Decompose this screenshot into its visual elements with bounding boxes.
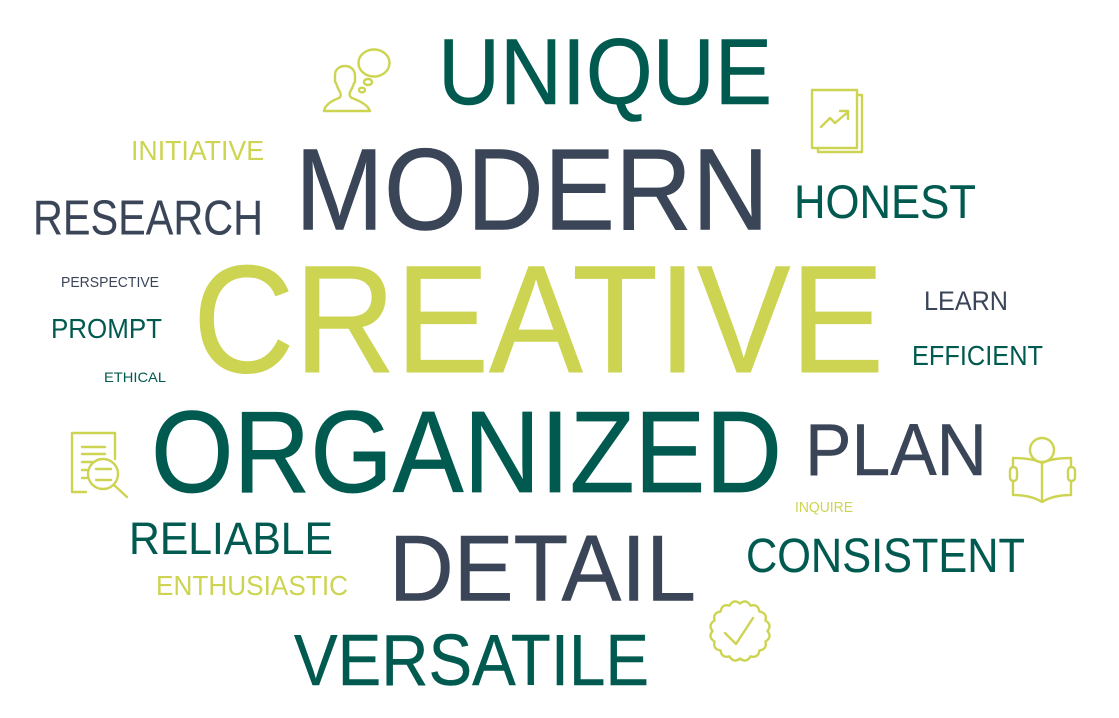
icon: document with magnifier bbox=[72, 433, 127, 497]
word: UNIQUE: UNIQUE bbox=[438, 19, 772, 124]
word: MODERN: MODERN bbox=[295, 124, 769, 254]
word: INITIATIVE: INITIATIVE bbox=[131, 135, 264, 166]
icon: report with rising chart bbox=[812, 90, 862, 152]
word: PLAN: PLAN bbox=[805, 410, 987, 491]
word: CREATIVE: CREATIVE bbox=[193, 234, 884, 405]
word: PERSPECTIVE: PERSPECTIVE bbox=[61, 274, 159, 291]
icon: person reading book bbox=[1010, 438, 1075, 502]
word: CONSISTENT: CONSISTENT bbox=[746, 530, 1025, 583]
word: INQUIRE: INQUIRE bbox=[795, 499, 853, 516]
word: DETAIL: DETAIL bbox=[389, 516, 696, 620]
word: RELIABLE: RELIABLE bbox=[129, 513, 333, 564]
word: EFFICIENT: EFFICIENT bbox=[912, 340, 1043, 371]
word: RESEARCH: RESEARCH bbox=[33, 192, 263, 246]
word: ETHICAL: ETHICAL bbox=[104, 369, 166, 385]
word: ORGANIZED: ORGANIZED bbox=[151, 387, 782, 517]
word: HONEST: HONEST bbox=[794, 175, 976, 228]
icon: check badge bbox=[710, 601, 770, 661]
icon: person thinking bbox=[324, 50, 390, 111]
word: PROMPT: PROMPT bbox=[51, 313, 162, 344]
word: ENTHUSIASTIC: ENTHUSIASTIC bbox=[156, 570, 348, 601]
word: VERSATILE: VERSATILE bbox=[294, 621, 649, 701]
word: LEARN: LEARN bbox=[924, 286, 1008, 316]
